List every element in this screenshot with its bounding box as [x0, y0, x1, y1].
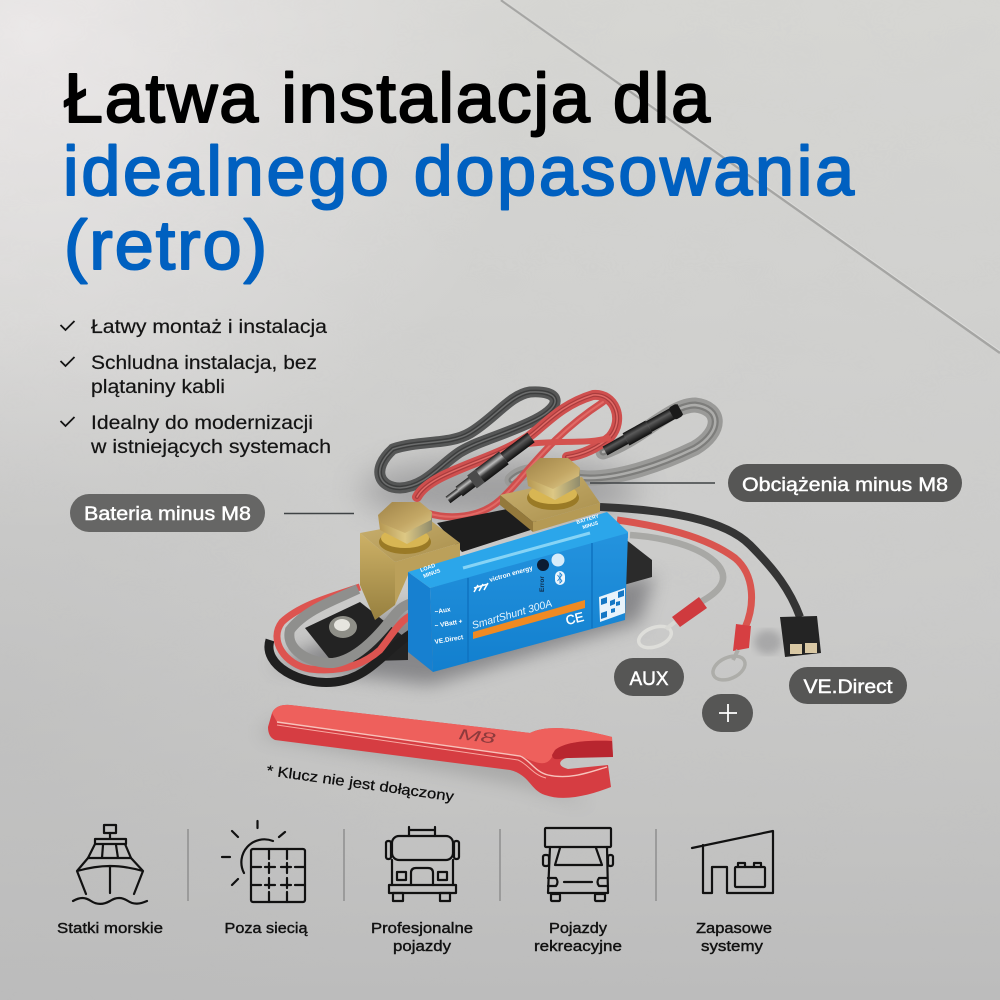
icon: truck: [386, 827, 459, 901]
ring lug: AUX: [636, 597, 707, 652]
fuse holder: left: [443, 431, 536, 506]
label: VE.Direct: [789, 667, 907, 704]
coiled sense cables: [380, 392, 715, 517]
feature checklist: Łatwy montaż i instalacja: [91, 317, 327, 338]
application: off-grid: [222, 821, 308, 937]
application dividers: [188, 829, 656, 901]
blue SmartShunt housing: MINUS: [423, 568, 442, 580]
wrench: [258, 705, 613, 805]
blue SmartShunt housing: SmartShunt 300A: [471, 598, 554, 632]
wrench: M8: [458, 726, 497, 748]
feature checklist: w istniejących systemach: [90, 437, 331, 458]
application: marine vessels: [57, 825, 163, 937]
label: Obciążenia minus M8: Obciążenia minus M8: [742, 475, 948, 496]
black shunt bar and mounts: [305, 505, 652, 662]
icon: ship: [73, 825, 147, 904]
loop cables at left: [269, 587, 412, 682]
blue SmartShunt housing: MINUS: [582, 520, 600, 531]
ring lug: plus: [709, 624, 751, 685]
icon: garage with battery: [692, 831, 773, 893]
blue SmartShunt housing: victron energy: [489, 565, 534, 584]
fuse holder: right: [602, 403, 684, 457]
label: Obciążenia minus M8: [590, 464, 962, 502]
VE.Direct connector: [780, 616, 821, 657]
blue SmartShunt housing: ~Aux: [434, 606, 452, 616]
title: Łatwa instalacja dla: [64, 59, 710, 137]
feature checklist: Idealny do modernizacji: [91, 413, 313, 434]
blue SmartShunt housing: VE.Direct: [434, 634, 465, 646]
application: recreational vehicles: Pojazdy: [549, 920, 608, 937]
title: (retro): [64, 206, 267, 284]
footnote: * Klucz nie jest dołączony: [265, 763, 456, 805]
application: backup systems: [692, 831, 773, 955]
application: marine vessels: Statki morskie: [57, 920, 163, 937]
blue SmartShunt housing: BATTERY: [576, 513, 600, 526]
device shadows: [270, 460, 782, 685]
brass terminal: battery: [500, 458, 600, 532]
blue SmartShunt housing: Error: [539, 576, 546, 592]
label: VE.Direct: VE.Direct: [804, 677, 893, 698]
application: backup systems: Zapasowe: [696, 920, 772, 937]
blue SmartShunt housing: [408, 512, 628, 672]
label: Bateria minus M8: [70, 494, 354, 532]
application: off-grid: Poza siecią: [224, 920, 308, 937]
application: professional vehicles: [371, 827, 473, 955]
product: SmartShunt with cables: [269, 392, 821, 685]
application: professional vehicles: pojazdy: [393, 938, 452, 955]
icon: motorhome: [543, 828, 613, 901]
feature checklist: [60, 317, 331, 458]
icon: sun and solar panel: [222, 821, 305, 902]
label: AUX: [614, 658, 684, 696]
application: backup systems: systemy: [701, 938, 764, 955]
title: idealnego dopasowania: [63, 132, 854, 210]
application: professional vehicles: Profesjonalne: [371, 920, 473, 937]
brass terminal: load: [360, 502, 460, 620]
label: AUX: AUX: [629, 669, 669, 690]
feature checklist: Schludna instalacja, bez: [91, 353, 317, 374]
mounting screw: [329, 616, 357, 638]
blue SmartShunt housing: LOAD: [420, 563, 436, 574]
label: plus: [702, 694, 753, 732]
blue SmartShunt housing: ~ VBatt +: [434, 618, 463, 630]
application: recreational vehicles: rekreacyjne: [534, 938, 622, 955]
lead-out cables: [600, 507, 800, 628]
feature checklist: plątaniny kabli: [91, 377, 225, 398]
blue SmartShunt housing: CE: [564, 609, 586, 628]
label: Bateria minus M8: Bateria minus M8: [84, 504, 251, 525]
application: recreational vehicles: [534, 828, 622, 955]
title: [63, 59, 854, 284]
